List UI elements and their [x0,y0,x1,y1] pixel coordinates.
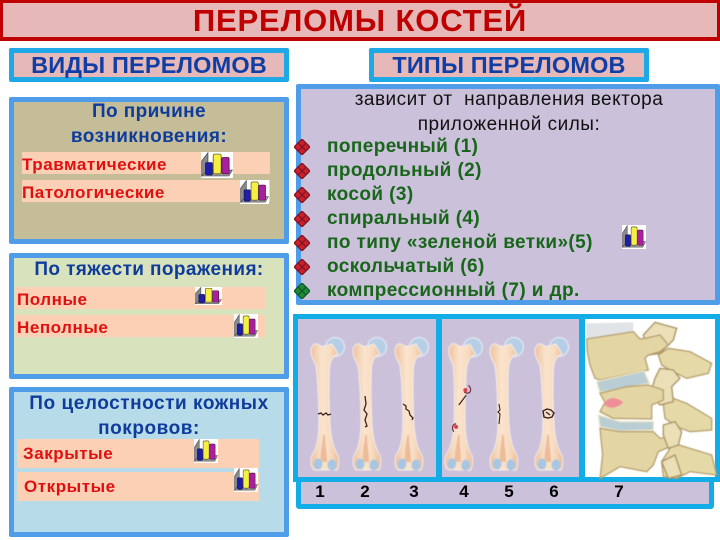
row: закрытые: Закрытые [23,444,113,463]
item: зеленой ветки: по типу «зеленой ветки»(5) [327,232,593,253]
lower spinous process [662,443,717,478]
panel: по целостности кожных покровов [9,387,289,537]
number 3: 3 [409,482,419,501]
item: оскольчатый: оскольчатый (6) [327,256,485,277]
panel: numbers strip [296,476,714,509]
lower body [600,428,670,478]
icon: chart закрытые [194,439,218,463]
panel heading: по целостности [29,393,269,439]
icon: chart патологические [240,180,269,204]
heading: виды переломов: ВИДЫ ПЕРЕЛОМОВ [31,52,267,78]
item: продольный: продольный (2) [327,160,482,181]
vertebrae: compression fracture [586,322,717,478]
panel heading: по причине: По причине [92,101,206,122]
number 7: 7 [614,482,624,501]
heading: типы переломов [369,48,649,82]
item: спиральный: спиральный (4) [327,208,480,229]
text: зависит от направления вектора: зависит от направления вектора [355,89,663,110]
row: закрытые [17,439,259,468]
fractured body [600,385,663,419]
disc 3 [598,415,653,431]
disc 2 [597,371,649,392]
icon: chart открытые [234,468,258,492]
upper vertebral body [587,332,668,380]
middle spinous process [663,398,712,432]
row: неполные: Неполные [17,318,108,337]
panel heading: по причине: возникновения: [71,126,227,147]
number 2: 2 [360,482,370,501]
item: компрессионный: компрессионный (7) и др. [327,280,580,301]
bone 4: spiral fracture [445,337,483,471]
row: полные: Полные [17,290,88,309]
panel heading: по целостности: покровов: [98,418,200,439]
title: ПЕРЕЛОМЫ КОСТЕЙ [193,3,527,38]
panel: типы переломов list [296,84,720,305]
item: поперечный: поперечный (1) [327,136,478,157]
top disc [586,322,633,339]
row: неполные [15,315,265,337]
heading: виды переломов [9,48,289,82]
panel: по тяжести поражения [9,253,289,379]
list: виды по направлению [294,136,593,301]
bone 6: comminuted fracture [535,338,568,470]
heading: типы переломов: ТИПЫ ПЕРЕЛОМОВ [392,52,626,78]
row: открытые: Открытые [24,477,116,496]
row: полные [15,287,265,309]
upper articular process [643,322,677,355]
item: косой: косой (3) [327,184,414,205]
text: зависит от направления вектора: приложенной силы: [418,114,600,135]
text: зависит от направления вектора [355,89,663,135]
row: травматические [22,152,270,174]
bone 5: greenstick fracture [490,338,524,470]
icon: chart травматические [201,152,233,178]
row: патологические [22,180,270,202]
upper spinous process [658,348,712,378]
number 1: 1 [315,482,325,501]
icon: chart типы [622,225,646,249]
icon: chart полные [195,287,222,305]
panel heading: по целостности: По целостности кожных [29,393,269,414]
number 4: 4 [459,482,469,501]
frame: illustration background [296,314,718,482]
lower articular process [662,422,682,478]
bone 3: oblique fracture [395,338,428,470]
title [0,0,720,41]
number 5: 5 [504,482,514,501]
bone 1: transverse fracture [311,338,344,470]
middle articular process [650,368,680,405]
fracture redness [604,398,623,408]
row: травматические: Травматические [22,155,167,174]
row: патологические: Патологические [22,183,165,202]
icon: chart неполные [234,314,258,338]
number 6: 6 [549,482,559,501]
panel heading: по тяжести: По тяжести поражения: [34,259,264,280]
panel: по причине возникновения [9,97,289,244]
panel heading: по причине [71,101,227,147]
row: открытые [17,472,259,501]
bone 2: longitudinal fracture [353,338,386,470]
